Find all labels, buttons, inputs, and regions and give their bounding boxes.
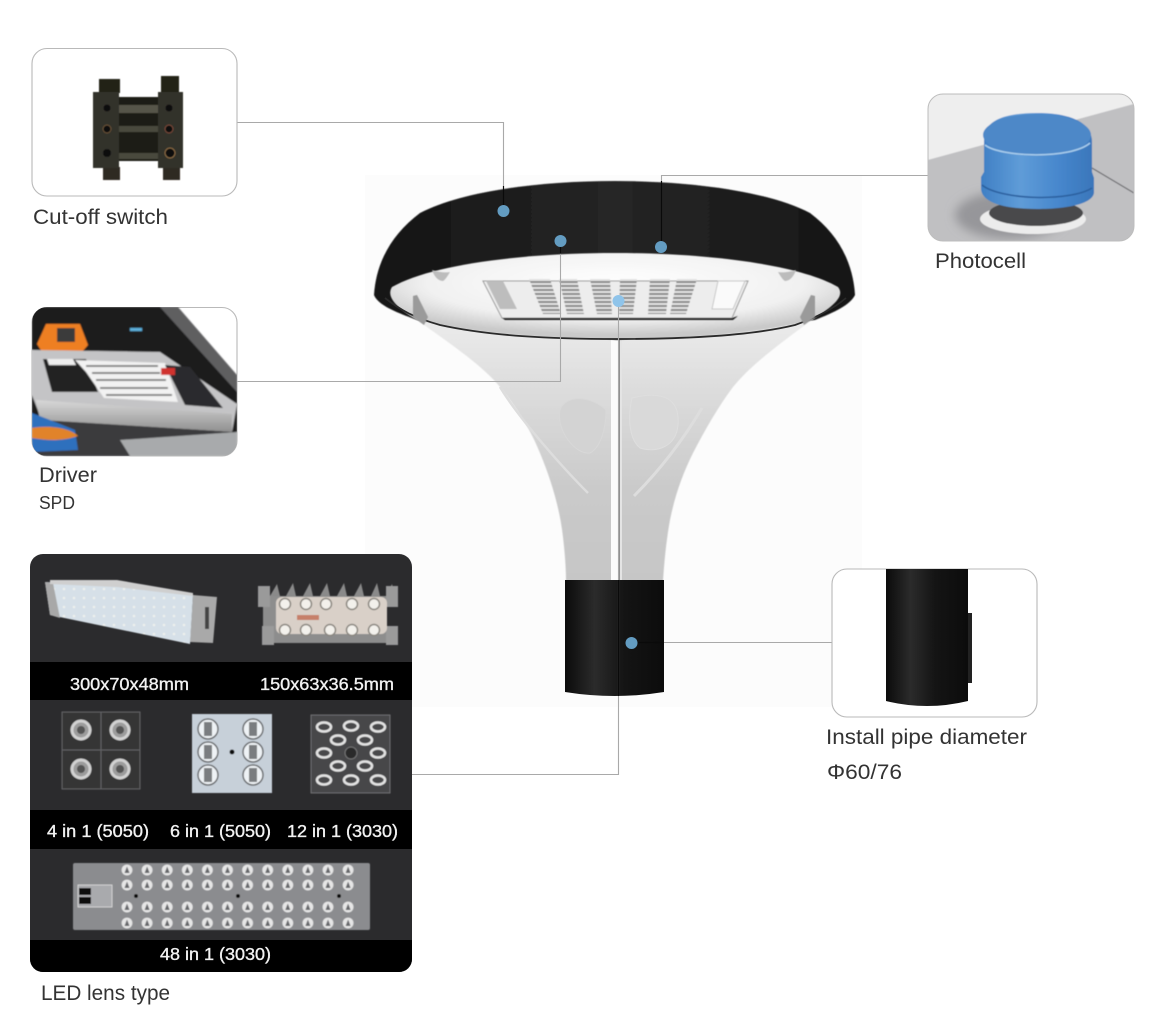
lamp head black shell bbox=[374, 181, 855, 340]
left clip bbox=[413, 270, 450, 325]
label: photocell: Photocell bbox=[935, 250, 1026, 273]
leader lines bbox=[237, 122, 928, 774]
LED module bbox=[483, 279, 748, 320]
LED module 300x70x48mm bbox=[45, 580, 217, 644]
rim line bbox=[385, 298, 846, 339]
LED module 150x63x36.5mm bbox=[258, 583, 398, 645]
caption: 150x63x36.5mm: 150x63x36.5mm bbox=[260, 674, 394, 694]
lamp head white underside bbox=[390, 253, 840, 339]
glass highlights bbox=[500, 387, 702, 496]
marker dots bbox=[498, 205, 667, 649]
label: SPD: SPD bbox=[39, 493, 75, 513]
mounting sleeve bbox=[565, 580, 664, 696]
icon: cut-off switch bbox=[93, 76, 183, 180]
panel: driver and SPD bbox=[32, 307, 237, 513]
label: driver: Driver bbox=[39, 464, 97, 487]
lamp backdrop bbox=[365, 175, 862, 707]
caption: 48 in 1: 48 in 1 (3030) bbox=[160, 944, 271, 964]
caption: 6 in 1: 6 in 1 (5050) bbox=[170, 821, 271, 841]
photo: driver bbox=[32, 307, 237, 456]
center pole bbox=[611, 335, 622, 582]
lens: 12 in 1 bbox=[311, 715, 390, 793]
label: cut-off switch: Cut-off switch bbox=[33, 206, 168, 229]
label: LED lens type: LED lens type bbox=[41, 982, 170, 1005]
panel: LED lens types bbox=[30, 554, 412, 972]
caption: 300x70x48mm: 300x70x48mm bbox=[70, 674, 189, 694]
panel: cut-off switch bbox=[32, 48, 237, 229]
photo: photocell bbox=[928, 94, 1134, 241]
panel: photocell bbox=[928, 94, 1134, 273]
icon: pipe sleeve bbox=[886, 569, 972, 706]
panel: install pipe bbox=[826, 569, 1037, 784]
street lamp bbox=[374, 181, 855, 696]
right clip bbox=[778, 270, 815, 325]
caption: 4 in 1: 4 in 1 (5050) bbox=[47, 821, 149, 841]
label: install pipe diameter: Install pipe diameter bbox=[826, 726, 1027, 749]
lens: 48 in 1 bbox=[73, 862, 370, 931]
caption strips bbox=[30, 662, 412, 972]
lamp body: flared glass bbox=[413, 317, 816, 582]
lens: 4 in 1 bbox=[62, 712, 140, 789]
caption: 12 in 1: 12 in 1 (3030) bbox=[287, 821, 398, 841]
lens: 6 in 1 bbox=[192, 714, 272, 793]
label: pipe diameter value: Φ60/76 bbox=[827, 761, 902, 784]
